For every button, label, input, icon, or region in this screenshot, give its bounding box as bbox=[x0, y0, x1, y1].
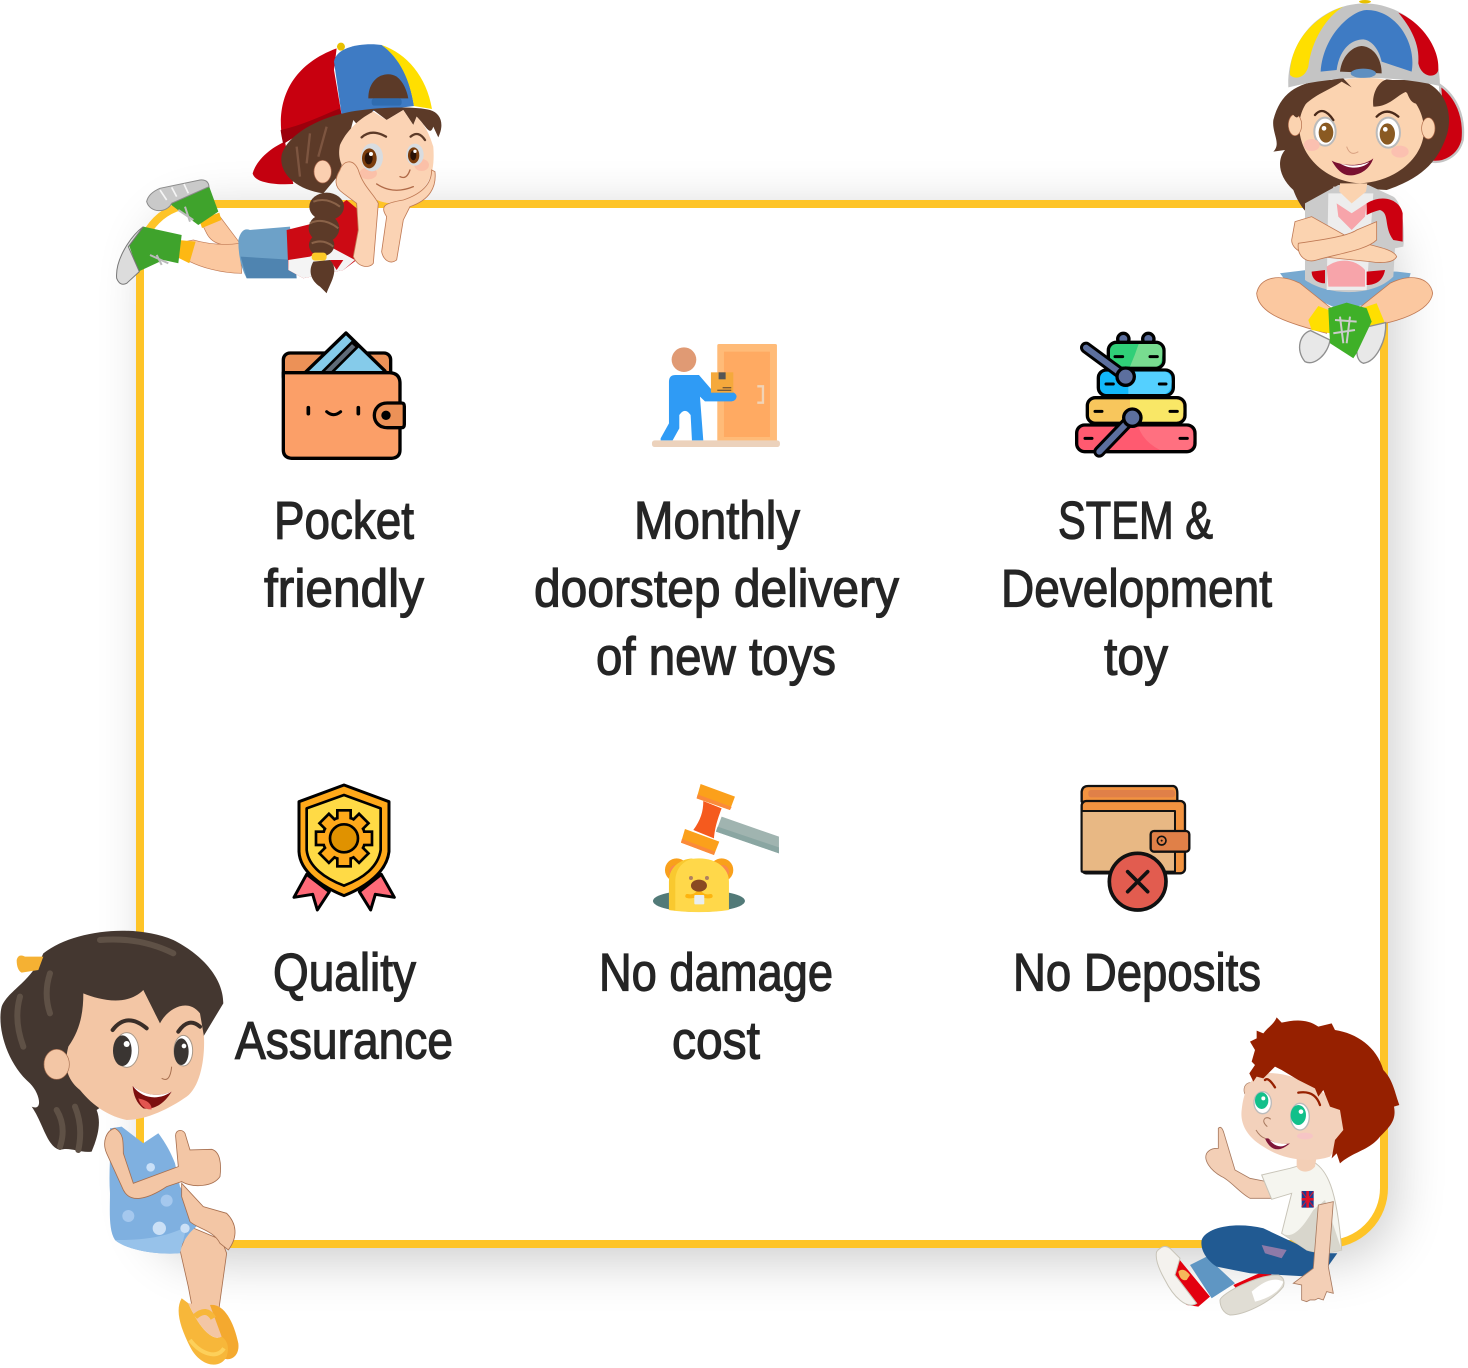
back sneaker and jeans bbox=[1201, 1225, 1337, 1315]
text: Quality Assurance bbox=[235, 944, 453, 1070]
support arm and hand bbox=[1293, 1202, 1333, 1302]
text: Pocket friendly: friendly bbox=[264, 560, 424, 618]
braid bbox=[1295, 178, 1334, 222]
back hair bbox=[0, 931, 223, 1152]
legs and shorts bbox=[1257, 270, 1433, 333]
ears bbox=[1244, 1083, 1355, 1150]
illustration: girl lying with red and blue cap, top left bbox=[117, 43, 441, 293]
text: Quality Assurance: Assurance bbox=[235, 1012, 453, 1070]
cap bbox=[281, 43, 432, 144]
crossed arms bbox=[1292, 217, 1397, 263]
text: No Deposits: No Deposits bbox=[1013, 944, 1261, 1002]
sneaker front bbox=[1156, 1246, 1235, 1307]
illustration: girl giving thumbs up, bottom left bbox=[0, 931, 238, 1365]
icon: courier delivering box to door bbox=[652, 344, 780, 447]
tee shirt bbox=[1305, 183, 1404, 292]
icon: quality shield with gear and ribbons bbox=[294, 785, 394, 910]
white t-shirt with flag bbox=[1262, 1162, 1342, 1252]
face bbox=[1299, 78, 1424, 183]
panel: yellow rounded card with soft shadow bbox=[140, 204, 1394, 1260]
illustration: girl sitting cross-legged, top right bbox=[1257, 0, 1463, 363]
long hair and braid bbox=[1273, 80, 1449, 218]
text: Monthly doorstep delivery of new toys bbox=[534, 492, 899, 686]
hair bow bbox=[17, 956, 43, 973]
text: Pocket friendly: Pocket bbox=[274, 492, 414, 550]
shirt bbox=[287, 200, 367, 278]
text: STEM and Development toy bbox=[1001, 492, 1272, 686]
cap brim behind head bbox=[1432, 85, 1463, 162]
icon: smiling wallet with cards bbox=[283, 333, 404, 458]
neck bbox=[1297, 1157, 1317, 1172]
eyes bbox=[361, 133, 425, 190]
text: No damage cost: No damage bbox=[599, 944, 833, 1002]
shorts and leg, lower bbox=[117, 227, 297, 284]
hair bbox=[281, 108, 441, 193]
legs and shoes bbox=[179, 1227, 238, 1365]
text: No damage cost bbox=[599, 944, 833, 1070]
mouth bbox=[133, 1067, 172, 1109]
socks and sneakers bbox=[1300, 303, 1386, 363]
icon: xylophone toy bbox=[1077, 333, 1195, 452]
text: Pocket friendly bbox=[264, 492, 424, 618]
illustration: red haired boy pointing up, bottom right bbox=[1156, 1017, 1399, 1315]
hands and arms bbox=[336, 162, 435, 266]
text: STEM and Development toy: Development bbox=[1001, 560, 1272, 618]
face bbox=[66, 990, 204, 1120]
blue dress bbox=[110, 1127, 203, 1254]
eyes and mouth bbox=[1304, 111, 1409, 175]
arm with thumbs up bbox=[105, 1128, 235, 1250]
icon: empty wallet with red cross bbox=[1082, 786, 1189, 910]
text: No damage cost: cost bbox=[672, 1012, 760, 1070]
red hair bbox=[1249, 1017, 1399, 1163]
icon: gavel over beaver in hole bbox=[653, 784, 779, 912]
arm and hand pointing bbox=[1206, 1127, 1272, 1198]
shoe and leg, upper bbox=[147, 180, 240, 245]
face bbox=[339, 110, 434, 203]
eyes and mouth bbox=[1254, 1092, 1313, 1149]
cap brim bbox=[253, 142, 293, 184]
cap bbox=[1288, 0, 1440, 87]
braid bbox=[309, 193, 344, 293]
text: Monthly doorstep delivery of new toys: of new toys bbox=[596, 628, 836, 686]
text: STEM and Development toy: toy bbox=[1104, 628, 1168, 686]
face bbox=[1241, 1073, 1347, 1160]
text: Monthly doorstep delivery of new toys: Monthly bbox=[634, 492, 800, 550]
text: STEM and Development toy: STEM & bbox=[1058, 492, 1213, 550]
text: Quality Assurance: Quality bbox=[273, 944, 416, 1002]
text: Monthly doorstep delivery of new toys: doorstep delivery bbox=[534, 560, 899, 618]
eyes bbox=[113, 1020, 200, 1067]
